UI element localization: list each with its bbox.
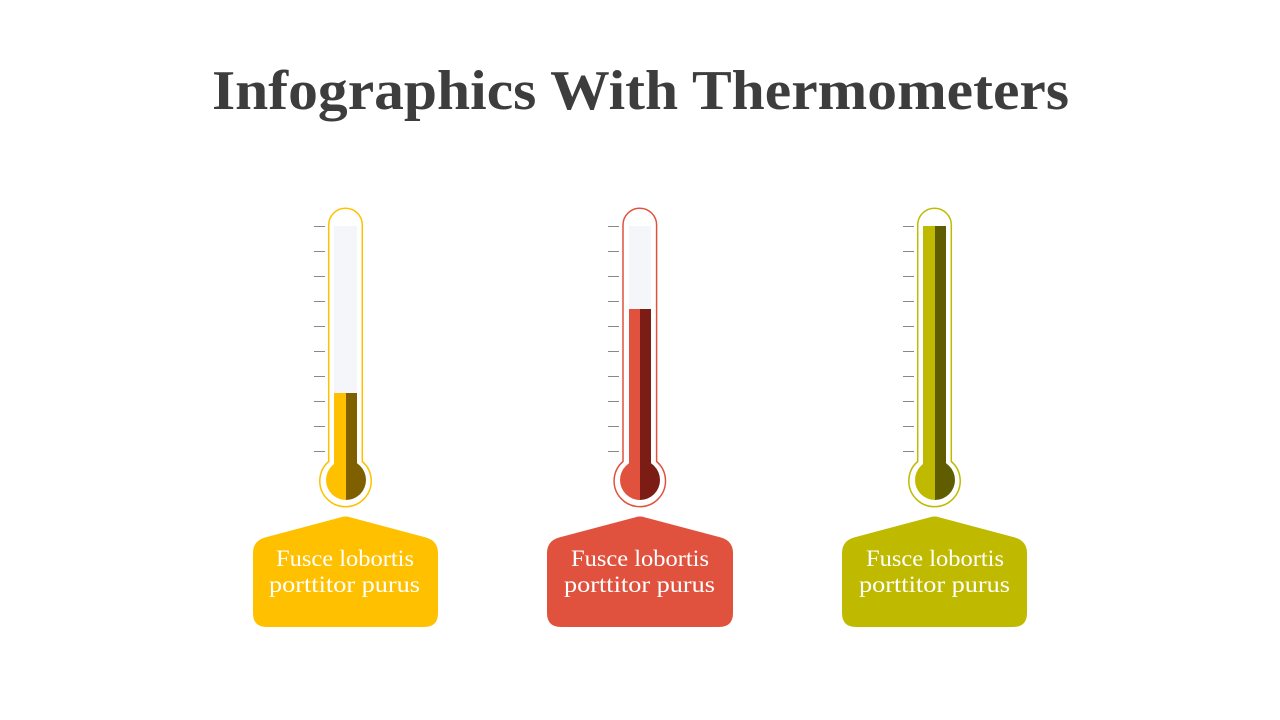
mercury level [915,226,955,500]
callout [547,516,733,627]
callout text [859,546,1010,597]
scale ticks [903,226,914,452]
panel: olive thermometer [842,208,1027,627]
scale ticks [314,226,325,452]
mercury level [326,393,366,500]
thermometer outline [320,208,371,507]
scale ticks [608,226,619,452]
callout text: Fusce lobortis [571,546,709,571]
callout text: porttitor purus [269,572,420,597]
thermometer outline [909,208,960,507]
callout text: porttitor purus [859,572,1010,597]
title: Infographics With Thermometers [212,60,1069,122]
callout text: Fusce lobortis [866,546,1004,571]
callout text [269,546,420,597]
callout text: Fusce lobortis [276,546,414,571]
empty tube [629,226,651,316]
callout text: porttitor purus [564,572,715,597]
callout text [564,546,715,597]
thermometer outline [614,208,666,507]
panel: red thermometer [547,208,733,627]
callout [253,516,438,627]
panel: yellow thermometer [253,208,438,627]
callout [842,516,1027,627]
mercury level [620,309,660,500]
empty tube [334,226,357,396]
